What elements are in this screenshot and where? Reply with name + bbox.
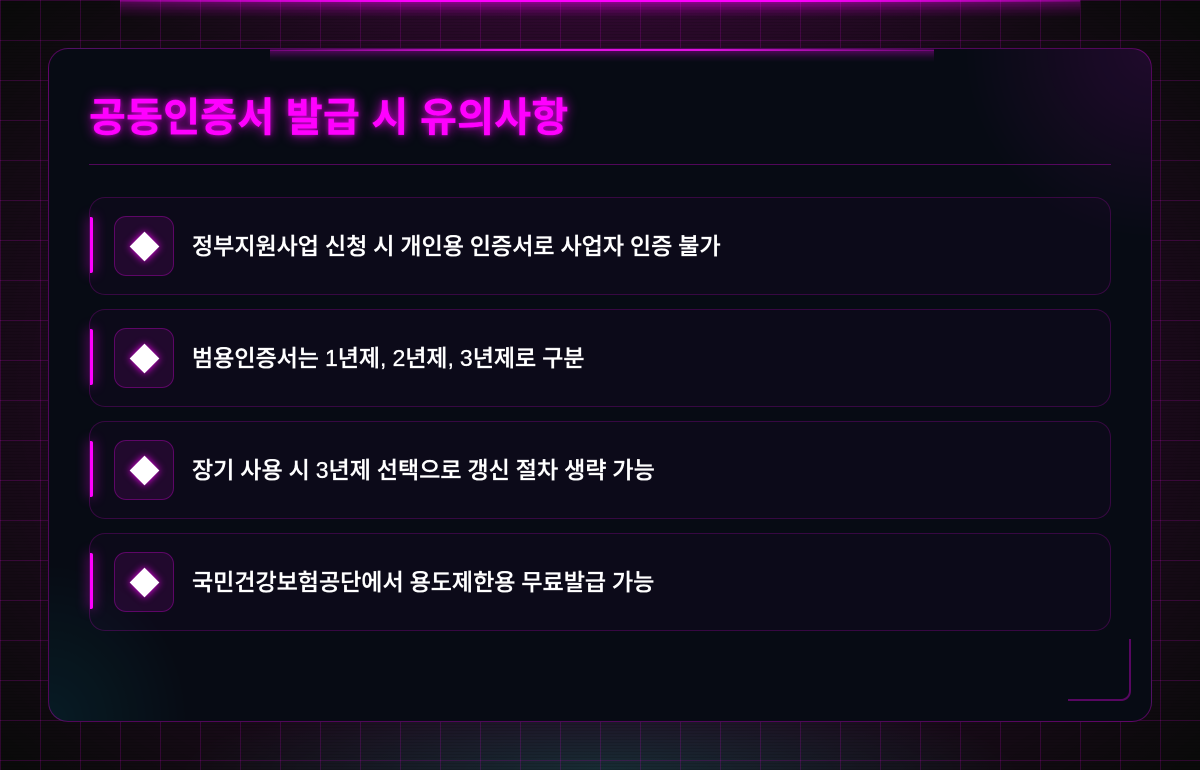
accent bar bbox=[90, 553, 93, 609]
title: 공동인증서 발급 시 유의사항 bbox=[89, 96, 568, 140]
icon: diamond bbox=[114, 440, 174, 500]
list item 4 bbox=[89, 533, 1111, 631]
icon: diamond bbox=[114, 216, 174, 276]
accent bar bbox=[90, 329, 93, 385]
item text: 장기 사용 시 3년제 선택으로 갱신 절차 생략 가능 bbox=[192, 457, 655, 483]
accent bar bbox=[90, 217, 93, 273]
corner bracket bbox=[1068, 639, 1131, 701]
accent bar bbox=[90, 441, 93, 497]
top glow bbox=[120, 0, 1080, 16]
list item 3 bbox=[89, 421, 1111, 519]
card top neon bar bbox=[270, 49, 934, 51]
item text: 정부지원사업 신청 시 개인용 인증서로 사업자 인증 불가 bbox=[192, 233, 721, 259]
item text: 국민건강보험공단에서 용도제한용 무료발급 가능 bbox=[192, 569, 654, 595]
card top glow bbox=[270, 50, 934, 62]
icon: diamond bbox=[114, 552, 174, 612]
icon: diamond bbox=[114, 328, 174, 388]
top neon bar bbox=[120, 0, 1080, 2]
list item 1 bbox=[89, 197, 1111, 295]
list item 2 bbox=[89, 309, 1111, 407]
item text: 범용인증서는 1년제, 2년제, 3년제로 구분 bbox=[192, 345, 585, 371]
